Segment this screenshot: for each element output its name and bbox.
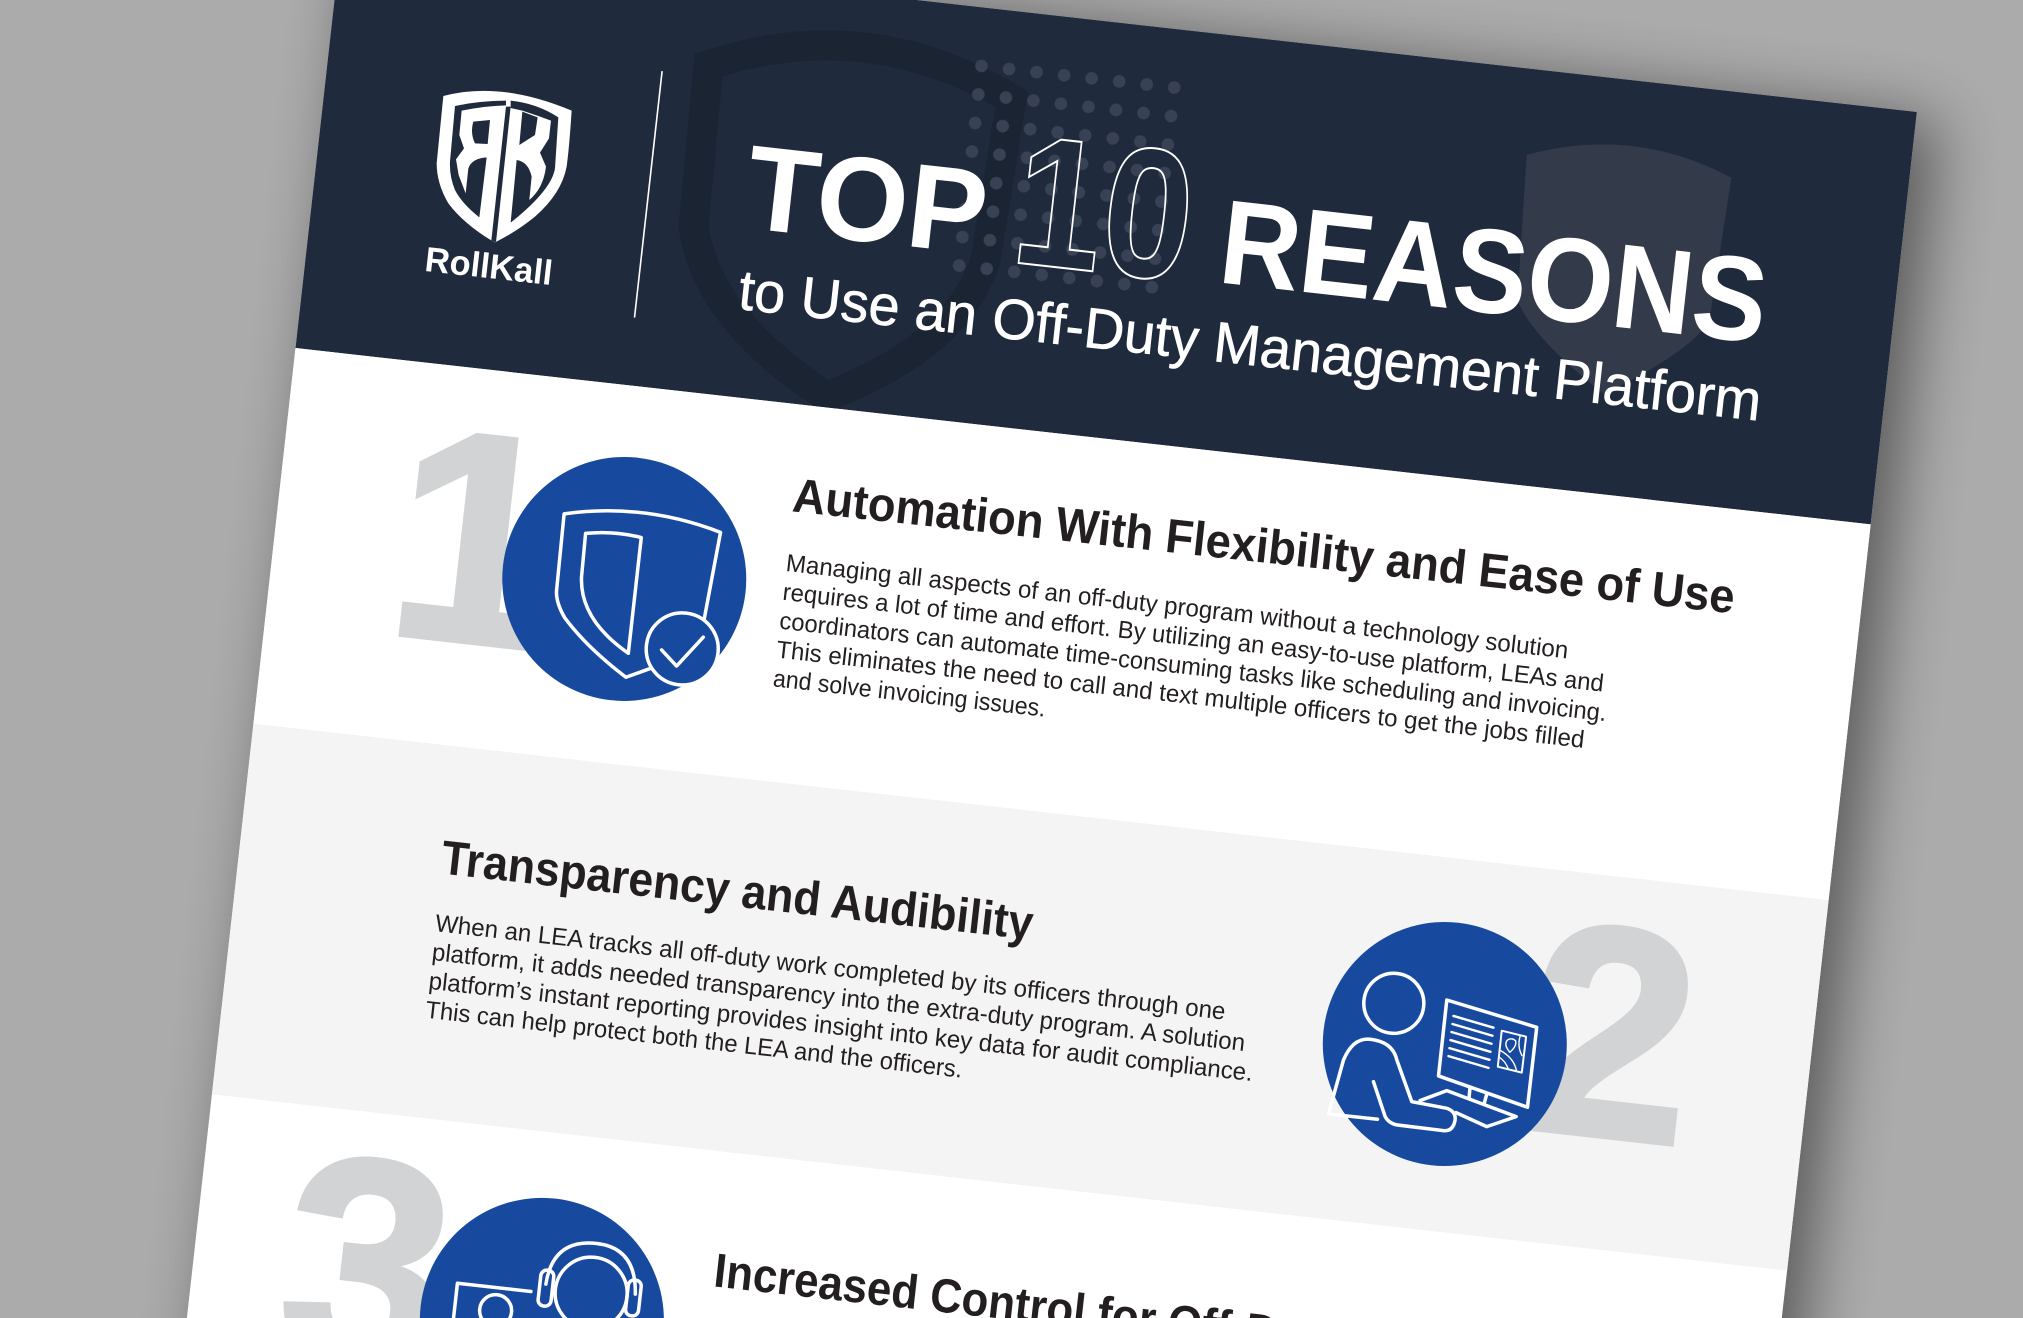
panel: reason 1 — [253, 348, 1871, 900]
background light shield — [1501, 134, 1734, 405]
reason 1 body — [772, 550, 1614, 785]
icon: RK shield — [437, 91, 572, 242]
panel: reason 2 — [212, 712, 1830, 1271]
logo: RollKall — [416, 76, 588, 295]
reason 1 body: Managing all aspects of an off-duty program without a technology solution — [785, 550, 1570, 664]
reason 1 body: coordinators can automate time-consuming tasks like scheduling and invoicing. — [778, 608, 1608, 727]
reason 2 heading: Transparency and Audibility — [439, 832, 1036, 951]
divider line — [635, 71, 662, 318]
reason 2 body: platform, it adds needed transparency into the extra-duty program. A solution — [431, 939, 1247, 1057]
reason 1 body: and solve invoicing issues. — [772, 665, 1047, 723]
reason 2 body: This can help protect both the LEA and the officers. — [424, 997, 964, 1084]
background dark shield outline — [673, 30, 1016, 413]
reason 1 body: requires a lot of time and effort. By utilizing an easy-to-use platform, LEAs and — [781, 579, 1605, 698]
numeral 2: 2 — [1510, 857, 1714, 1209]
title — [738, 67, 1780, 386]
reason 2 body: When an LEA tracks all off-duty work completed by its officers through one — [434, 910, 1227, 1026]
title: TOP — [740, 120, 994, 280]
reason 1 body: This eliminates the need to call and text multiple officers to get the jobs filled — [775, 637, 1586, 754]
panel: reason 3 — [266, 1088, 1358, 1318]
title: REASONS — [1214, 175, 1774, 369]
icon: shield with check — [489, 444, 759, 714]
background dot pattern — [944, 50, 1190, 303]
icon: dispatcher with headset — [407, 1185, 677, 1318]
title: 10 — [1004, 97, 1204, 321]
panel: header band — [296, 0, 1917, 524]
reason 2 body — [424, 910, 1261, 1116]
reason 2 body: platform’s instant reporting provides insight into key data for audit compliance. — [427, 968, 1254, 1087]
numeral 1: 1 — [375, 362, 578, 715]
subtitle: to Use an Off-Duty Management Platform — [736, 258, 1765, 434]
logo wordmark: RollKall — [423, 240, 555, 293]
reason 1 heading: Automation With Flexibility and Ease of Use — [790, 469, 1737, 624]
icon: person at computer — [1310, 909, 1580, 1179]
